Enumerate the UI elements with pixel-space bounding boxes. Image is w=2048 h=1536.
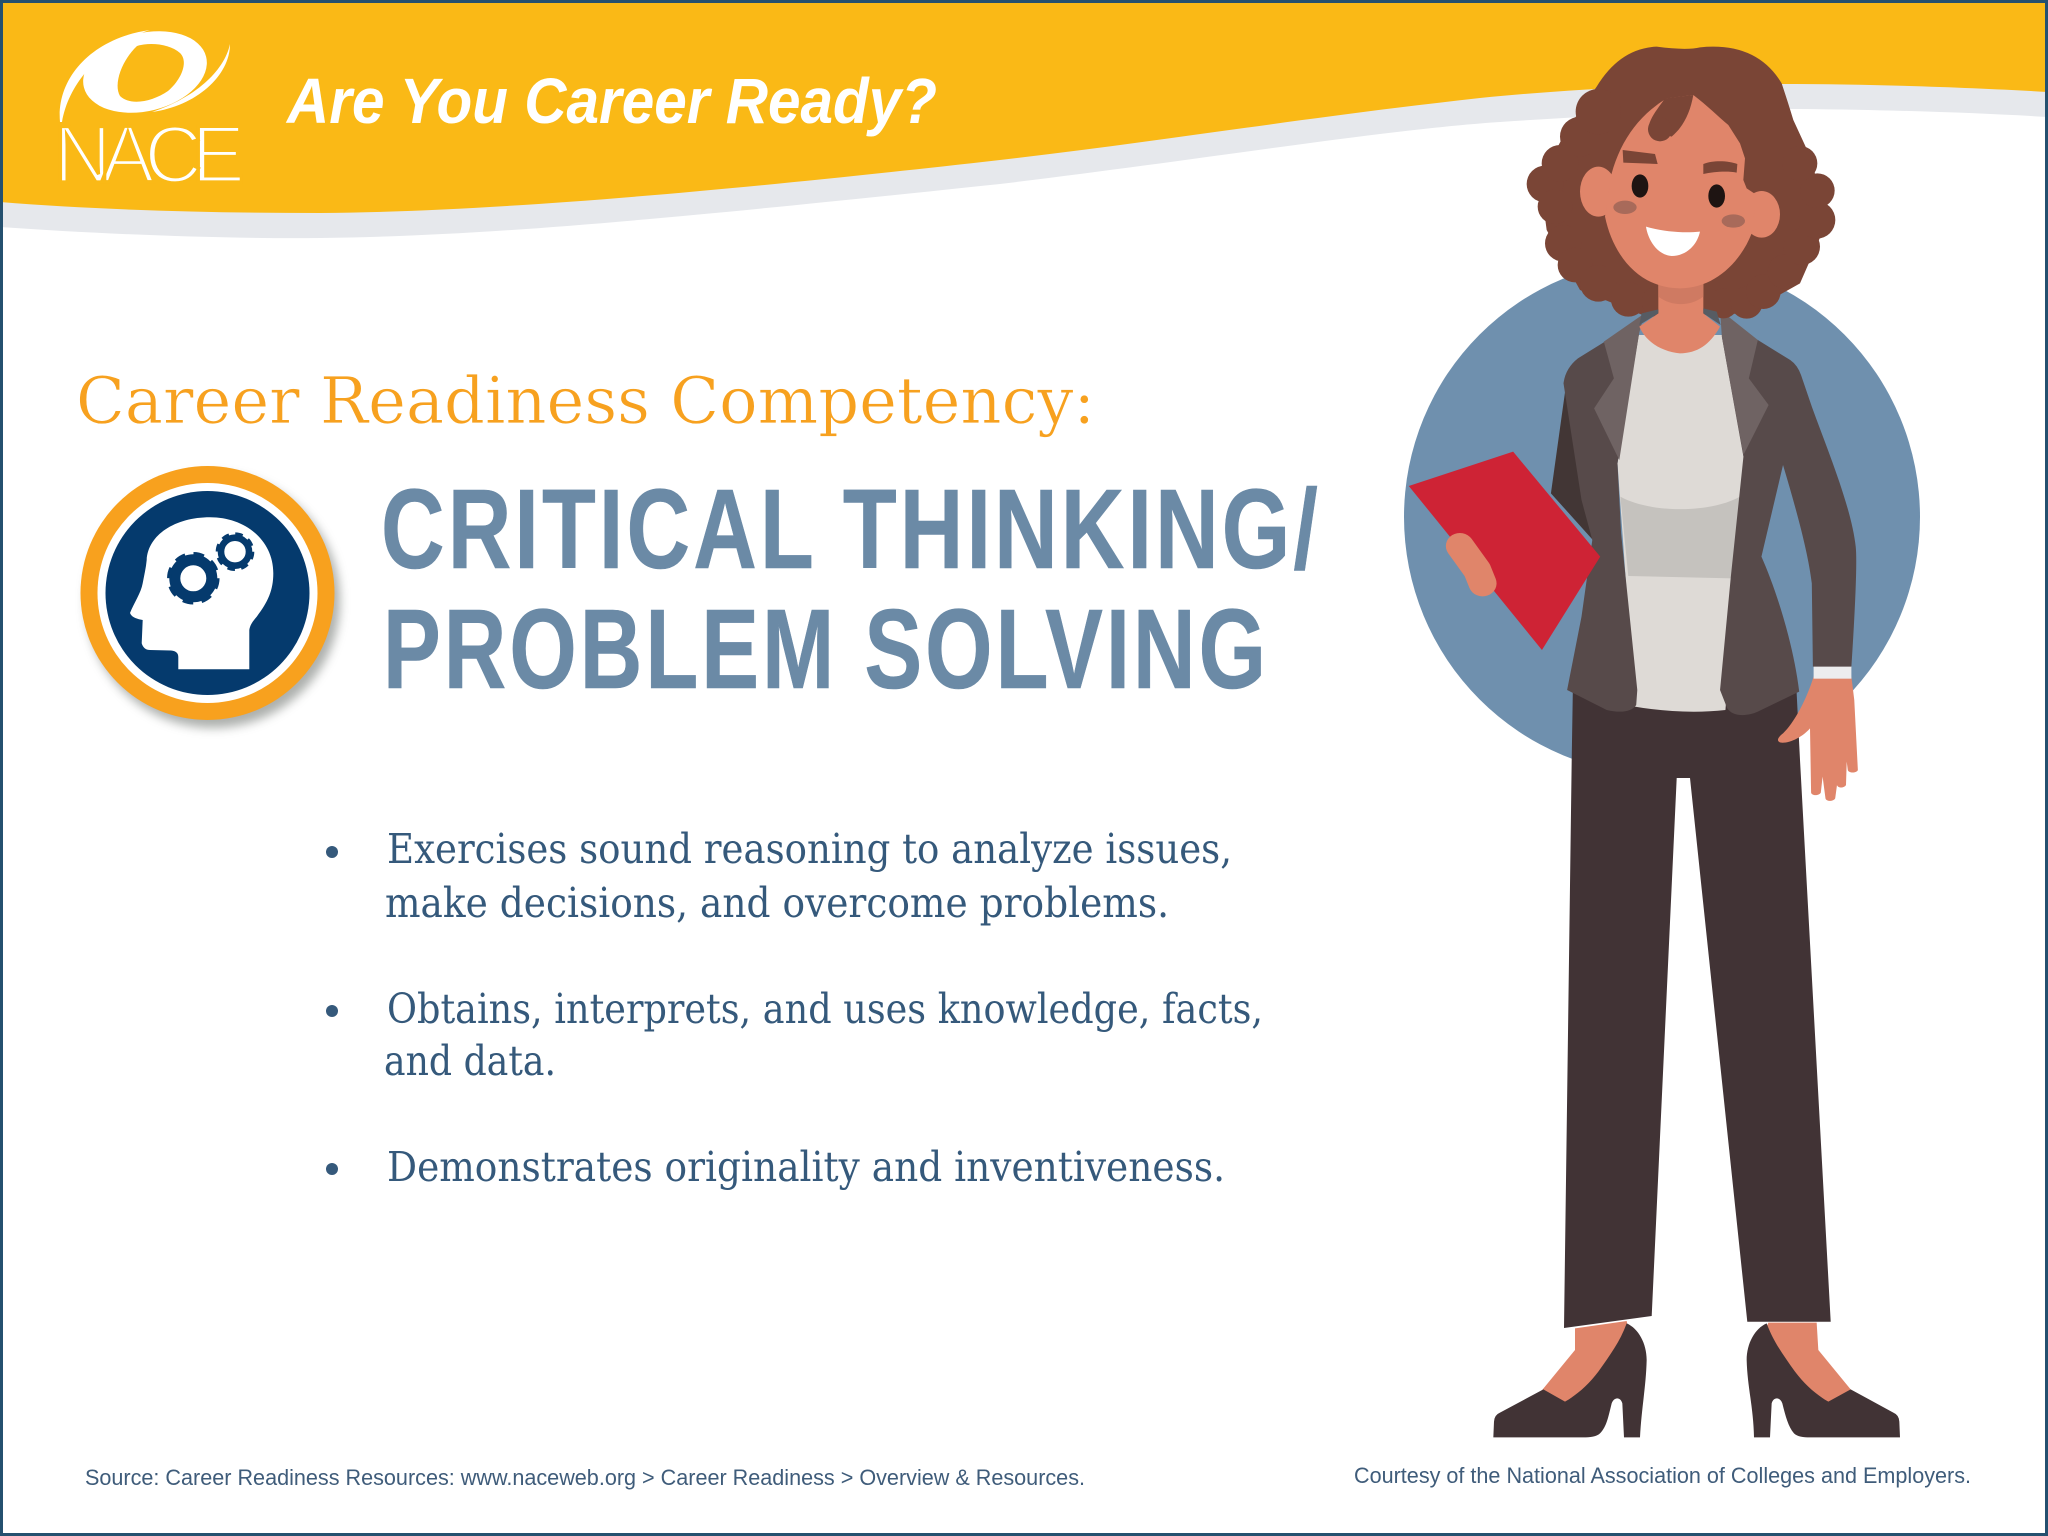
- figure: woman with folder: [1409, 47, 1900, 1437]
- bullet 2: and data.: [384, 1037, 556, 1085]
- hair mass: [1527, 47, 1835, 319]
- cheeks: [1613, 201, 1637, 214]
- bullet 2: [326, 985, 1263, 1085]
- eyebrows: [1623, 150, 1737, 174]
- icon: head with gears badge: [80, 466, 340, 728]
- header wave banner: [0, 0, 2048, 238]
- large gear: [169, 554, 217, 602]
- blouse: [1617, 335, 1744, 712]
- ears: [1580, 167, 1617, 217]
- courtesy note: Courtesy of the National Association of Colleges and Employers.: [1354, 1463, 1971, 1488]
- hand and cuff: [1778, 666, 1858, 801]
- main heading: [381, 466, 1321, 712]
- red folder: [1409, 452, 1600, 650]
- bullet 1: make decisions, and overcome problems.: [385, 879, 1169, 927]
- right shoe: [1747, 1323, 1900, 1437]
- heading line 2: PROBLEM SOLVING: [383, 586, 1269, 712]
- forehead curl: [1648, 95, 1693, 141]
- trousers: [1564, 680, 1831, 1328]
- head silhouette: [130, 517, 273, 669]
- right lapel: [1720, 310, 1769, 455]
- small gear: [217, 534, 253, 570]
- jacket left side: [1564, 333, 1639, 712]
- left shoe: [1493, 1323, 1647, 1437]
- face: [1605, 95, 1757, 288]
- collar shadow: [1639, 308, 1721, 325]
- blue circle backdrop: [1404, 259, 1920, 775]
- right ankle: [1763, 1323, 1852, 1403]
- hand holding folder: [1460, 546, 1483, 583]
- bullet 3: Demonstrates originality and inventiveness.: [387, 1143, 1225, 1191]
- bullet 1: [326, 825, 1232, 927]
- torso and arms: [1409, 310, 1858, 801]
- banner title: Are You Career Ready?: [285, 65, 937, 137]
- head and hair: [1527, 47, 1835, 353]
- bullet 2: Obtains, interprets, and uses knowledge, facts,: [387, 985, 1263, 1033]
- logo: NACE: [54, 19, 242, 200]
- eyebrow heading: Career Readiness Competency:: [76, 364, 1095, 439]
- left ankle: [1542, 1321, 1630, 1403]
- logo wordmark: NACE: [54, 110, 242, 200]
- neck shadow: [1658, 283, 1703, 304]
- blouse shadow band: [1620, 497, 1740, 578]
- heading line 1: CRITICAL THINKING/: [381, 466, 1321, 592]
- bullet 1: Exercises sound reasoning to analyze issues,: [387, 825, 1232, 873]
- neck: [1639, 277, 1720, 353]
- bullet list: [326, 825, 1263, 1191]
- jacket right side: [1720, 337, 1856, 715]
- eyes: [1632, 174, 1648, 198]
- source note: Source: Career Readiness Resources: www.naceweb.org > Career Readiness > Overview & Resources.: [85, 1465, 1085, 1490]
- legs and shoes: [1493, 1321, 1900, 1437]
- smile: [1646, 227, 1700, 256]
- left lapel: [1594, 313, 1644, 460]
- logo swirl ring: [60, 19, 230, 125]
- back arm: [1551, 390, 1596, 543]
